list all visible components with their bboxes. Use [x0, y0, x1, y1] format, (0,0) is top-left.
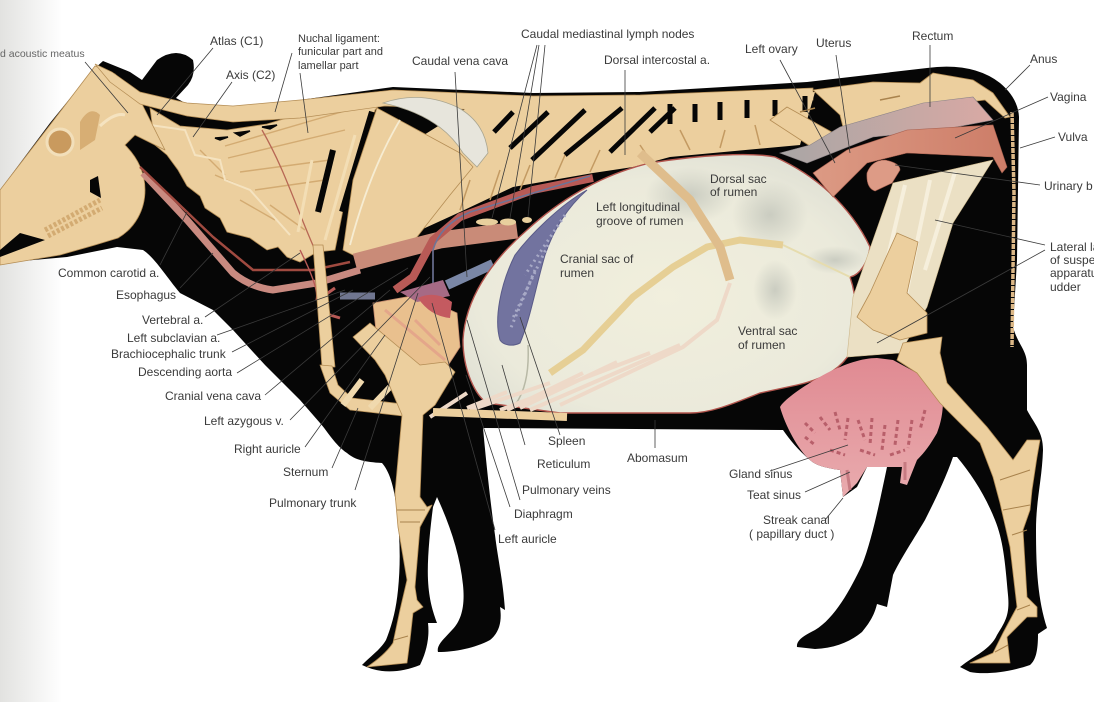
- labels: Left ovary: [745, 42, 798, 56]
- labels: Pulmonary trunk: [269, 496, 357, 510]
- last rib and caudal rib tips: [430, 153, 730, 417]
- labels: Brachiocephalic trunk: [111, 347, 227, 361]
- cervico-thoracic black gaps: [413, 252, 500, 283]
- labels: Cranial vena cava: [165, 389, 261, 403]
- labels: Left subclavian a.: [127, 331, 220, 345]
- labels: Common carotid a.: [58, 266, 159, 280]
- labels: Diaphragm: [514, 507, 573, 521]
- rectum: [780, 97, 993, 163]
- labels: Left azygous v.: [204, 414, 284, 428]
- labels: Sternum: [283, 465, 328, 479]
- skull and lower jaw: [0, 66, 165, 265]
- pelvis and sacrum: [770, 73, 1010, 148]
- heart: [373, 280, 460, 373]
- labels: Reticulum: [537, 457, 590, 471]
- labels: Right auricle: [234, 442, 301, 456]
- labels: Rectum: [912, 29, 953, 43]
- labels: Dorsal sac: [710, 172, 767, 186]
- labels: groove of rumen: [596, 214, 683, 228]
- labels: Atlas (C1): [210, 34, 263, 48]
- labels: Teat sinus: [747, 488, 801, 502]
- labels: Pulmonary veins: [522, 483, 611, 497]
- tail vertebrae: [1012, 112, 1014, 347]
- neck vertebrae and lamellar nuchal ligament: [150, 92, 392, 262]
- labels: Urinary b: [1044, 179, 1093, 193]
- thoracic ribs and vertebrae: [298, 92, 815, 262]
- labels: Nuchal ligament:: [298, 33, 380, 45]
- funicular nuchal ligament and spine band: [95, 64, 813, 122]
- labels: udder: [1050, 280, 1081, 294]
- udder with gland sinus and teats: [780, 358, 943, 497]
- labels: Gland sinus: [729, 467, 792, 481]
- rumen with reticulum and abomasum: [463, 155, 870, 413]
- labels: Vagina: [1050, 90, 1087, 104]
- scapula with cartilage: [343, 97, 488, 265]
- labels: Vulva: [1058, 130, 1088, 144]
- spleen: [498, 190, 587, 345]
- leader lines: [85, 45, 1055, 530]
- labels: of rumen: [710, 185, 757, 199]
- labels: Spleen: [548, 434, 585, 448]
- sternum, ulna and foreleg bones: [313, 245, 455, 667]
- labels: Axis (C2): [226, 68, 275, 82]
- femur: [857, 233, 927, 340]
- labels: Abomasum: [627, 451, 688, 465]
- labels: Dorsal intercostal a.: [604, 53, 710, 67]
- labels: Anus: [1030, 52, 1057, 66]
- labels: Left longitudinal: [596, 200, 680, 214]
- labels: Streak canal: [763, 513, 830, 527]
- labels: Caudal mediastinal lymph nodes: [521, 27, 694, 41]
- vagina and vulva: [813, 125, 1007, 197]
- labels: Caudal vena cava: [412, 54, 508, 68]
- aorta and vessels: [140, 167, 593, 318]
- labels: Uterus: [816, 36, 851, 50]
- labels: rumen: [560, 266, 594, 280]
- lateral laminae of suspensory apparatus: [847, 160, 993, 357]
- labels: funicular part and: [298, 46, 383, 58]
- labels: Esophagus: [116, 288, 176, 302]
- labels: Cranial sac of: [560, 252, 634, 266]
- tibia and hind foot bones: [897, 337, 1040, 663]
- labels: Vertebral a.: [142, 313, 203, 327]
- labels: lamellar part: [298, 60, 359, 72]
- labels: of rumen: [738, 338, 785, 352]
- labels: [0, 27, 1094, 546]
- labels: Descending aorta: [138, 365, 232, 379]
- labels: ( papillary duct ): [749, 527, 834, 541]
- lymph nodes: [476, 217, 532, 226]
- labels: Ventral sac: [738, 324, 797, 338]
- labels: Left auricle: [498, 532, 557, 546]
- urinary bladder: [867, 160, 900, 191]
- labels: d acoustic meatus: [0, 48, 85, 60]
